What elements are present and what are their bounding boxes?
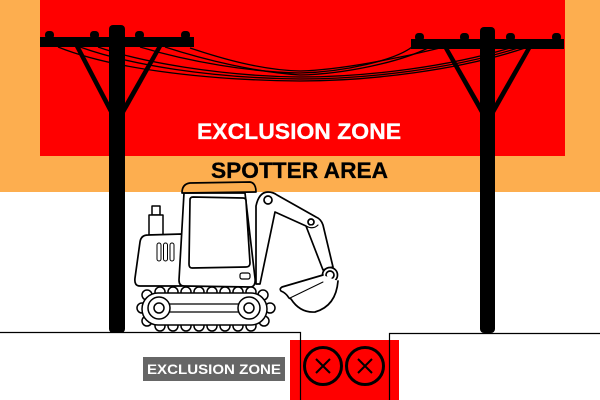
spotter area band bbox=[0, 0, 600, 192]
engine vents bbox=[157, 243, 174, 261]
excavator bbox=[135, 182, 338, 331]
engine body bbox=[135, 234, 182, 286]
heading: spotter area: SPOTTER AREA bbox=[211, 158, 388, 183]
heading: exclusion zone: EXCLUSION ZONE bbox=[197, 119, 401, 144]
door handle bbox=[240, 273, 250, 279]
ground line with trench bbox=[0, 332, 600, 400]
excavation exclusion zone bbox=[290, 340, 399, 400]
left utility pole bbox=[40, 25, 194, 333]
exclusion zone label: EXCLUSION ZONE bbox=[147, 361, 281, 377]
excavator arm and boom bbox=[256, 192, 338, 284]
cab roof bbox=[182, 182, 256, 193]
underground pipe left bbox=[304, 348, 342, 384]
crawler track bbox=[137, 287, 275, 331]
underground pipe right bbox=[346, 348, 384, 384]
exclusion zone label bbox=[143, 357, 285, 381]
excavator bucket bbox=[280, 275, 338, 312]
exhaust stack bbox=[149, 206, 163, 235]
right utility pole bbox=[411, 27, 564, 333]
cab window bbox=[189, 197, 250, 268]
power lines bbox=[58, 47, 525, 81]
overhead exclusion zone bbox=[40, 0, 565, 156]
cab bbox=[179, 193, 255, 287]
